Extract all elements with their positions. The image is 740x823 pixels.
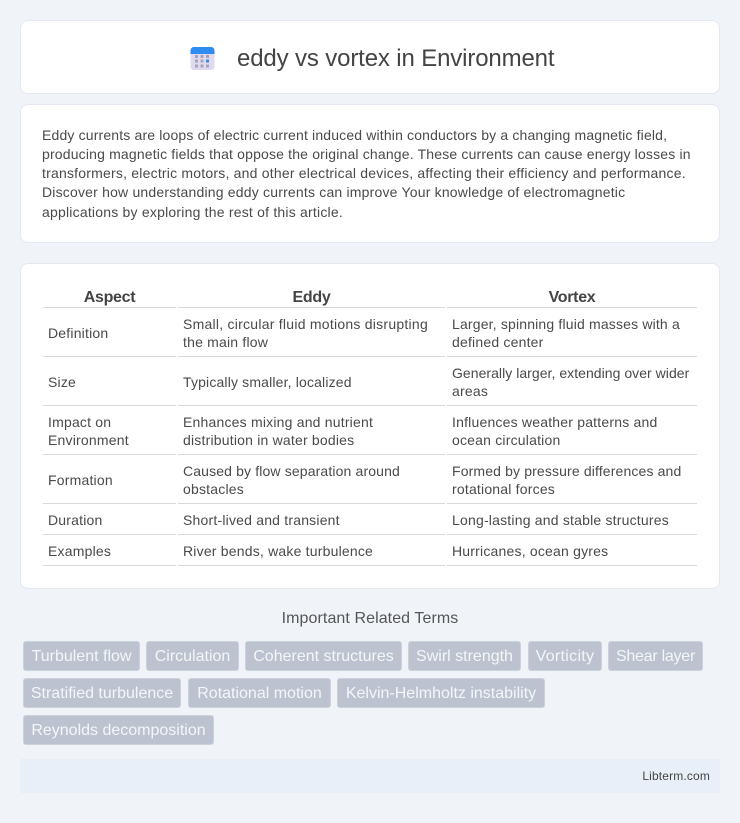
related term tags [23,641,703,745]
row: duration: Short-lived and transient [183,512,340,528]
related term tags: Stratified turbulence [31,685,173,702]
row: size [48,365,690,399]
related term tags: Kelvin-Helmholtz instability [346,685,536,702]
header panel [20,20,720,94]
row: formation: Formation [48,472,113,488]
row: impact on environment: Influences weather patterns and [452,414,657,430]
row: formation: Formed by pressure differences and [452,463,681,479]
table header: Vortex [549,289,595,306]
row: formation: Caused by flow separation around [183,463,400,479]
row: impact on environment [48,414,657,448]
comparison table panel [20,263,720,589]
row: duration [48,512,669,528]
row: impact on environment: distribution in water bodies [183,432,354,448]
title: eddy vs vortex in Environment [237,45,554,72]
row: examples: Examples [48,543,111,559]
related term tags: Turbulent flow [32,648,131,665]
row: impact on environment: Environment [48,432,129,448]
row: examples [48,543,608,559]
intro paragraph: Discover how understanding eddy currents can improve Your knowledge of electromagnetic [42,184,625,200]
row: impact on environment: ocean circulation [452,432,560,448]
table header: Eddy [293,289,330,306]
related term tags: Swirl strength [416,648,513,665]
intro paragraph: transformers, electric motors, and other electrical devices, affecting their efficiency and performance. [42,165,686,181]
table [43,289,697,566]
intro paragraph [42,127,691,220]
row: impact on environment: Impact on [48,414,111,430]
row: size: areas [452,383,488,399]
row: definition: Definition [48,325,108,341]
table header [84,289,596,306]
row: definition: Larger, spinning fluid masses with a [452,316,680,332]
related term tags: Rotational motion [197,685,322,702]
table header: Aspect [84,289,135,306]
row: impact on environment: Enhances mixing and nutrient [183,414,373,430]
row: definition: the main flow [183,334,268,350]
intro paragraph: Eddy currents are loops of electric current induced within conductors by a changing magnetic field, [42,127,667,143]
row: formation: obstacles [183,481,244,497]
intro paragraph: applications by exploring the rest of this article. [42,204,343,220]
intro text panel [20,104,720,243]
related term tags: Shear layer [616,648,695,665]
row: examples: Hurricanes, ocean gyres [452,543,608,559]
row: duration: Long-lasting and stable structures [452,512,669,528]
row: formation: rotational forces [452,481,555,497]
row: formation [48,463,681,497]
footer bar [20,759,720,793]
related term tags: Circulation [155,648,230,665]
related term tags: Reynolds decomposition [31,722,206,739]
related terms heading: Important Related Terms [282,610,458,627]
row: duration: Duration [48,512,103,528]
row: size: Typically smaller, localized [183,374,352,390]
related term tags: Vorticity [536,648,594,665]
related term tags: Coherent structures [253,648,394,665]
row: definition: Small, circular fluid motions disrupting [183,316,428,332]
row: size: Size [48,374,76,390]
icon: calendar [190,47,214,70]
row: examples: River bends, wake turbulence [183,543,373,559]
intro paragraph: producing magnetic fields that oppose the original change. These currents can cause energy losses in [42,146,691,162]
footer credit: Libterm.com [642,769,710,783]
row: definition [48,316,680,350]
row: definition: defined center [452,334,544,350]
row: size: Generally larger, extending over wider [452,365,689,381]
